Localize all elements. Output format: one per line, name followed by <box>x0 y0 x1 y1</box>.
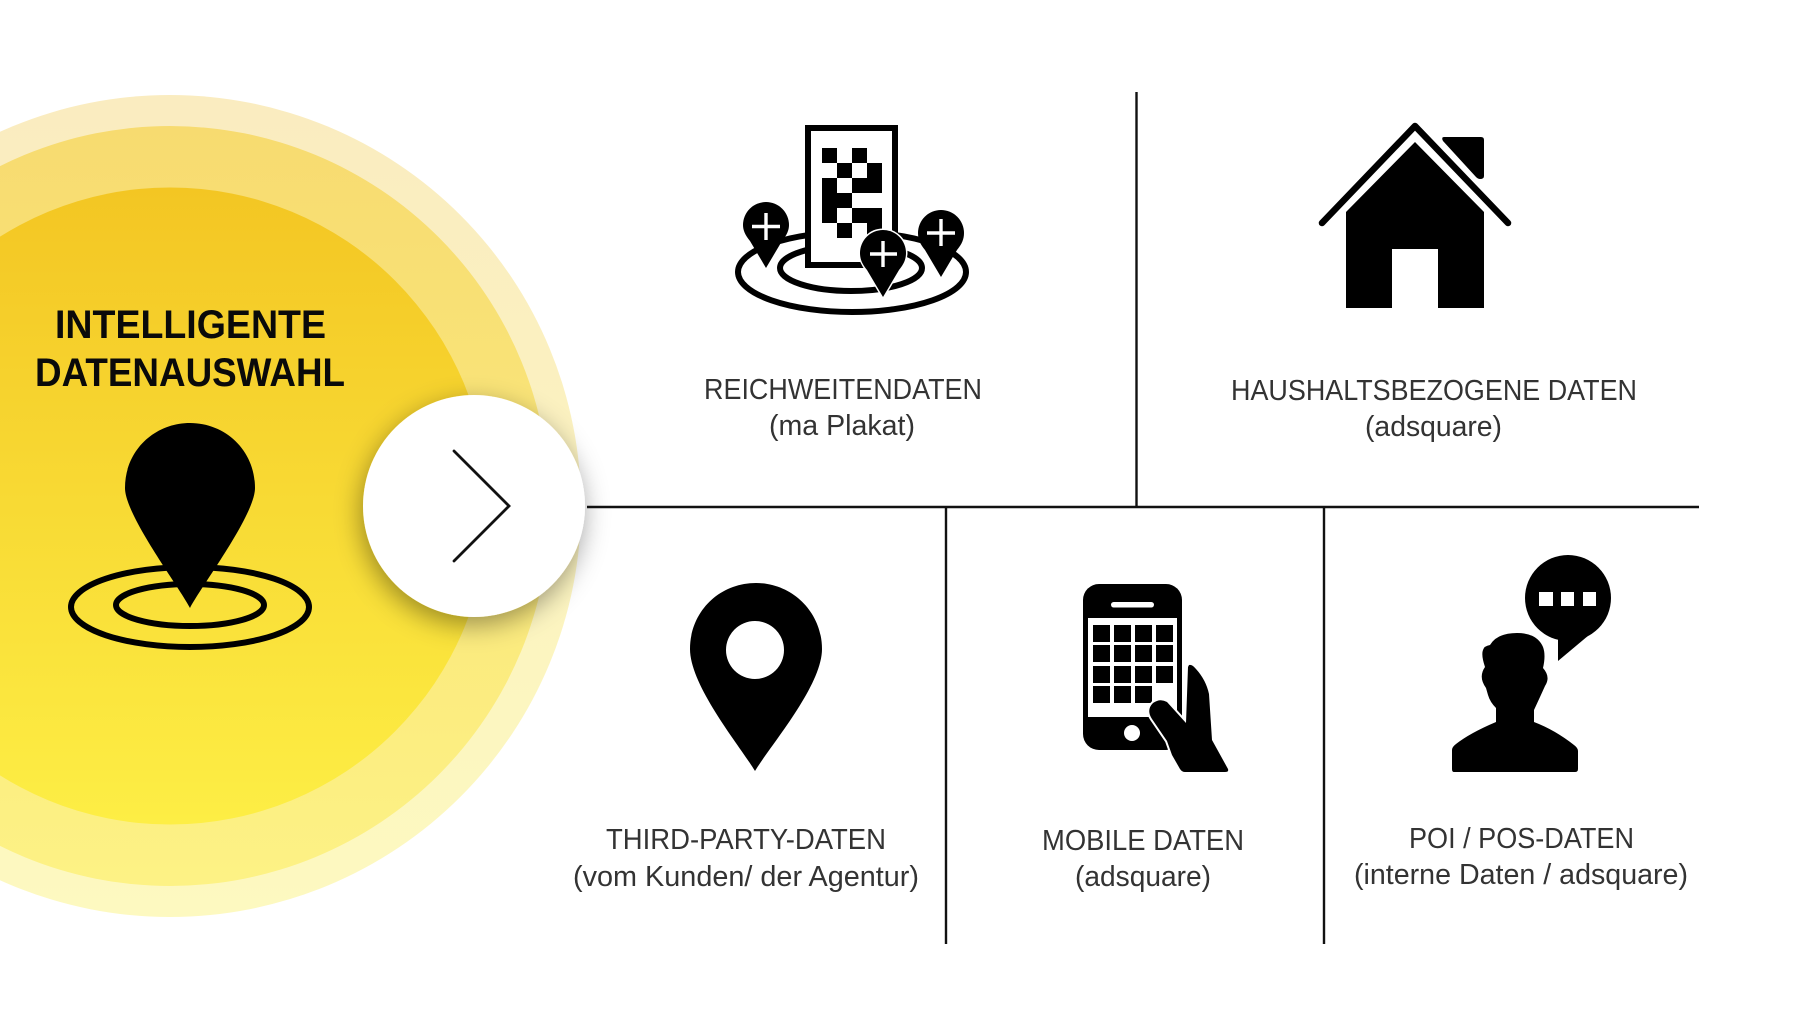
label: Haushaltsbezogene Daten: HAUSHALTSBEZOGENE DATEN <box>1231 375 1637 407</box>
label: Third-Party-Daten <box>573 824 919 893</box>
icon: map pin with hole <box>690 583 822 771</box>
heading: Intelligente Datenauswahl: DATENAUSWAHL <box>35 351 345 395</box>
label: Haushaltsbezogene Daten <box>1231 375 1637 443</box>
label: Reichweitendaten <box>704 374 982 442</box>
heading: Intelligente Datenauswahl: INTELLIGENTE <box>55 303 326 347</box>
icon: billboard with pins <box>738 128 966 312</box>
label: Third-Party-Daten: THIRD-PARTY-DATEN <box>606 824 886 856</box>
label: POI / POS-Daten: (interne Daten / adsquare) <box>1354 859 1688 891</box>
arrow button: white circle with chevron <box>363 395 585 617</box>
label: Reichweitendaten: REICHWEITENDATEN <box>704 374 982 406</box>
label: Mobile Daten: (adsquare) <box>1075 861 1211 893</box>
label: Reichweitendaten: (ma Plakat) <box>769 410 915 442</box>
icon: house <box>1322 126 1508 308</box>
label: POI / POS-Daten: POI / POS-DATEN <box>1409 823 1634 855</box>
label: Mobile Daten <box>1042 825 1244 893</box>
label: POI / POS-Daten <box>1354 823 1688 891</box>
label: Haushaltsbezogene Daten: (adsquare) <box>1365 411 1502 443</box>
label: Third-Party-Daten: (vom Kunden/ der Agentur) <box>573 861 919 893</box>
heading: Intelligente Datenauswahl <box>35 303 345 395</box>
panel: yellow concentric circles <box>0 95 581 917</box>
label: Mobile Daten: MOBILE DATEN <box>1042 825 1244 857</box>
icon: smartphone in hand <box>1083 584 1228 772</box>
icon: person with speech bubble <box>1452 555 1611 772</box>
icon: location pin on target rings <box>71 423 309 647</box>
